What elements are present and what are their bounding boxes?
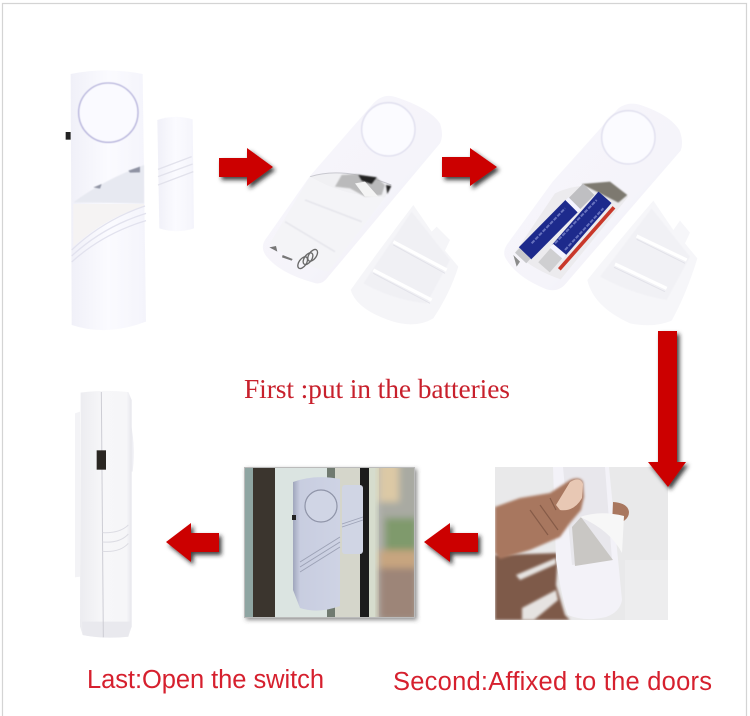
compartment <box>515 186 628 279</box>
arrow: left 1 <box>424 523 478 562</box>
product side view with switch <box>75 391 134 638</box>
speaker ring <box>79 83 138 142</box>
dark circuit <box>358 175 391 194</box>
speaker disc <box>362 103 415 156</box>
open alarm without batteries <box>263 96 442 284</box>
cover ribs <box>373 242 447 300</box>
thumbnail <box>556 479 583 510</box>
side ridges <box>103 525 128 551</box>
terminals <box>269 246 293 261</box>
exterior roof <box>379 550 417 568</box>
alarm body <box>71 70 146 330</box>
battery cover 2 <box>587 201 697 325</box>
side body <box>80 391 132 638</box>
battery 1 cap <box>574 189 589 204</box>
electronics opening <box>310 173 391 197</box>
mounting plate <box>75 412 80 577</box>
mounted sensor <box>342 485 363 554</box>
photo: alarm mounted on door <box>244 460 419 625</box>
side switch <box>97 450 106 470</box>
mounted ridges <box>300 537 340 572</box>
battery 2 barrel <box>558 197 605 251</box>
tray ribs <box>285 200 362 252</box>
finger gaps <box>516 558 558 620</box>
device silhouette <box>263 96 442 284</box>
sensor ridges <box>158 157 193 185</box>
door panel <box>275 468 328 617</box>
battery 2 <box>544 197 614 269</box>
mounted switch <box>292 515 296 520</box>
blurred exterior <box>375 468 414 617</box>
back finger <box>612 502 629 521</box>
exterior base <box>376 468 414 551</box>
opening rim <box>310 173 391 185</box>
battery cover 1 <box>351 205 458 324</box>
mounted speaker <box>305 490 337 522</box>
bottom bevel <box>82 622 131 638</box>
arrow: down <box>648 331 686 487</box>
cover shell <box>351 205 458 324</box>
dark frame <box>253 468 276 617</box>
electronics <box>335 174 385 197</box>
arrow: left 2 <box>166 523 219 562</box>
battery 2 band <box>556 249 560 253</box>
case seam <box>101 392 103 637</box>
peeled paper <box>580 513 624 553</box>
battery 1 barrel <box>525 206 572 253</box>
battery 1 <box>521 189 589 258</box>
left glass <box>245 468 253 617</box>
open alarm with batteries <box>504 104 682 290</box>
white contact <box>355 182 378 197</box>
mounted alarm body <box>293 477 340 611</box>
mounted sensor ridges <box>342 517 363 527</box>
window interior detail <box>93 167 140 189</box>
photo: peeling adhesive <box>495 467 668 620</box>
cover ridges <box>72 206 146 262</box>
battery 2 label strip <box>559 207 614 269</box>
exterior tan <box>379 460 399 502</box>
tray floor <box>270 177 385 272</box>
rib shadows <box>614 239 685 292</box>
caption: first step: First :put in the batteries <box>244 373 510 404</box>
thumb and hand <box>495 478 584 559</box>
sensor <box>157 117 194 231</box>
photo frame <box>244 467 415 618</box>
caption: second step: Second:Affixed to the doors <box>393 668 712 696</box>
speaker disc <box>602 111 655 164</box>
battery 1 band <box>572 203 575 206</box>
product: alarm and magnetic sensor <box>66 70 194 330</box>
spring contact <box>296 248 319 270</box>
lower hand <box>495 553 570 620</box>
lower backdrop <box>625 560 668 620</box>
knuckle creases <box>530 498 558 535</box>
device recess <box>563 467 612 565</box>
battery window <box>73 165 144 203</box>
cover shell <box>587 201 697 325</box>
frame panel <box>335 468 361 617</box>
battery 1 base <box>521 253 525 258</box>
adhesive pad <box>572 517 613 566</box>
cover ribs <box>615 236 687 288</box>
speaker bulge <box>128 417 134 472</box>
panel gap <box>327 468 335 617</box>
switch nub <box>66 132 71 140</box>
arrow: right 2 <box>442 148 497 186</box>
battery 2 cap <box>544 253 556 267</box>
device back <box>553 467 622 619</box>
mounted alarm <box>292 477 363 611</box>
circuit <box>582 182 627 203</box>
device silhouette <box>504 104 682 290</box>
black strip <box>360 468 369 617</box>
terminals <box>513 255 520 267</box>
caption: last step: Last:Open the switch <box>87 666 324 694</box>
cover inner floor <box>363 212 450 303</box>
exterior lower <box>379 568 417 620</box>
lower window <box>73 204 144 247</box>
exterior greenery <box>385 518 417 550</box>
label print <box>532 200 603 250</box>
photo scene <box>245 468 414 617</box>
pale strip <box>369 468 379 617</box>
photo background <box>495 467 668 620</box>
cover inner floor <box>600 208 690 300</box>
rib shadows <box>373 245 445 303</box>
arrow: right 1 <box>219 148 273 186</box>
